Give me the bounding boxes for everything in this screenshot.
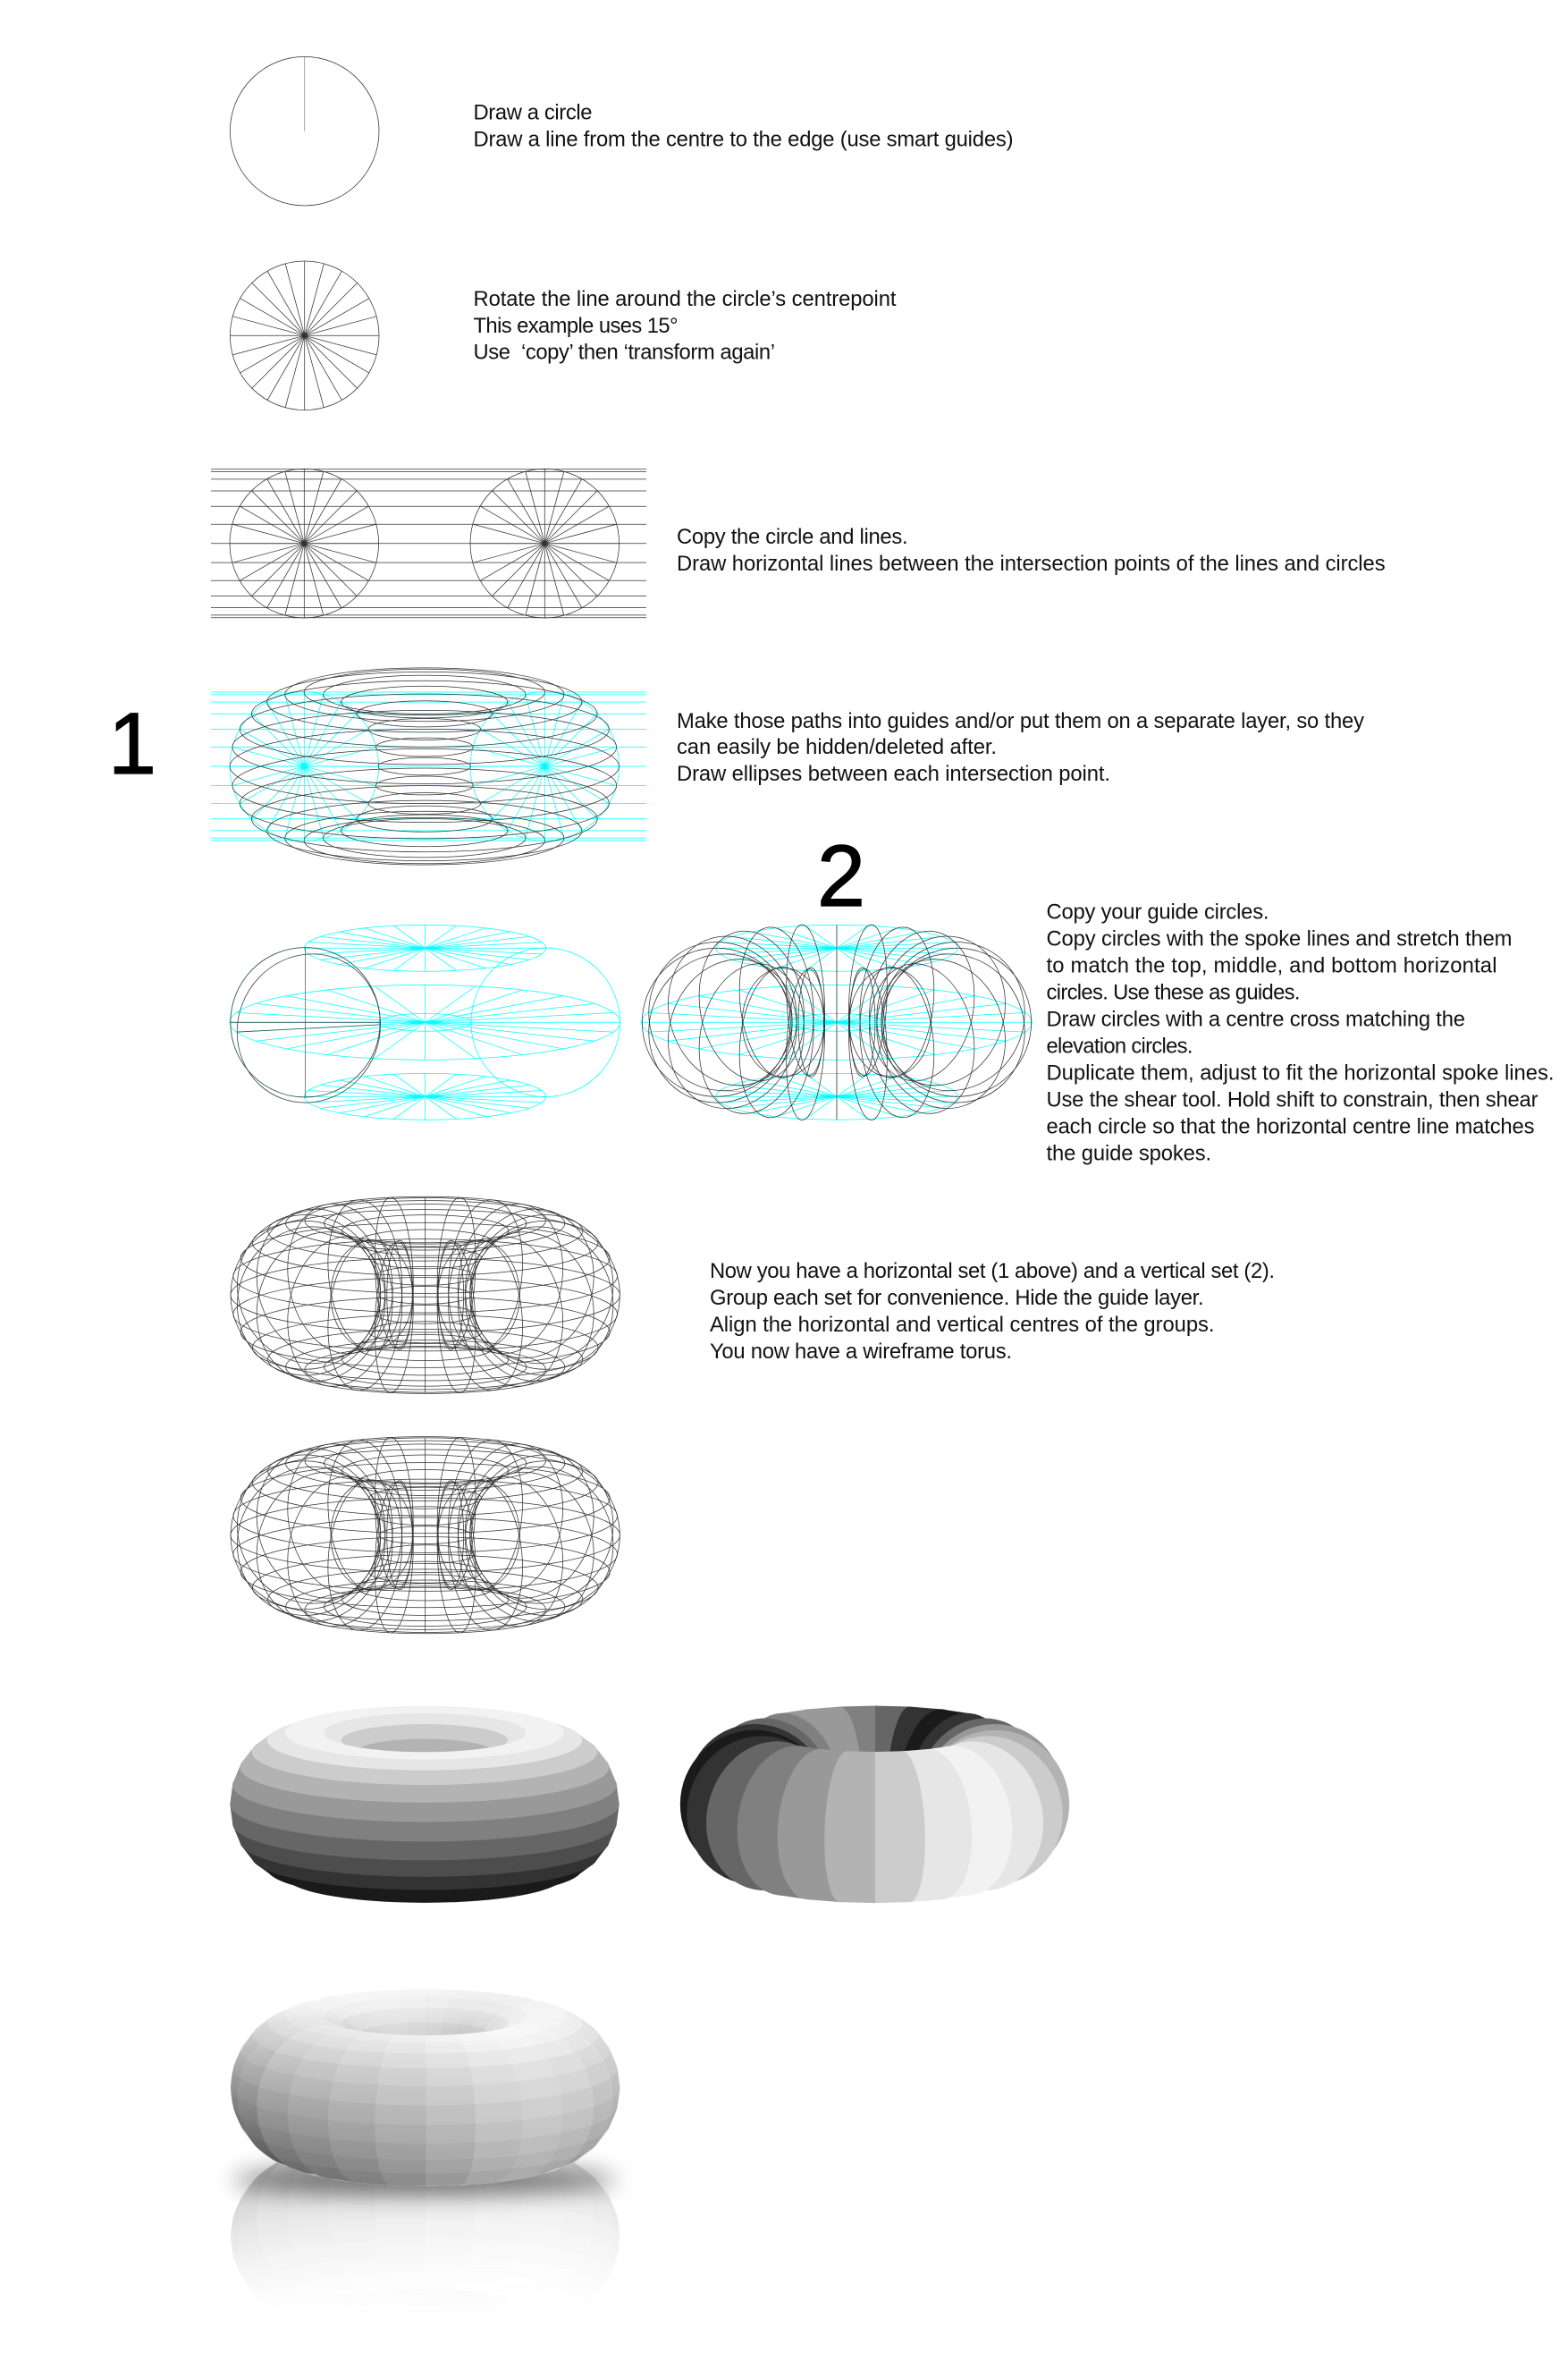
sheared circle with centre line <box>237 951 381 1106</box>
step 1 text <box>474 100 1014 151</box>
number 1: 1 <box>108 695 156 792</box>
step 5 right: vertical set over guides <box>642 912 1032 1133</box>
step 5 text: circles. Use these as guides. <box>1046 981 1300 1005</box>
cyan right guide circle <box>471 948 620 1097</box>
step 3: two circles with horizontal lines <box>211 469 1386 618</box>
step 1 text: Draw a circle <box>474 100 592 124</box>
step 1 text: Draw a line from the centre to the edge (use smart guides) <box>474 127 1014 151</box>
step 3 text: Copy the circle and lines. <box>677 525 908 549</box>
shaded torus <box>231 1977 620 2198</box>
vertical circle set <box>642 912 1032 1133</box>
step 4: horizontal ellipses <box>211 668 1364 865</box>
step 4 text: can easily be hidden/deleted after. <box>677 735 997 759</box>
step 4 text: Draw ellipses between each intersection point. <box>677 762 1110 786</box>
step 3 text: Draw horizontal lines between the intersection points of the lines and circles <box>677 552 1386 576</box>
step 7: second wireframe torus <box>231 1424 620 1645</box>
step 2 text: This example uses 15° <box>474 314 678 338</box>
step 4 text <box>677 709 1364 786</box>
step 5 text: each circle so that the horizontal centre line matches <box>1046 1115 1535 1139</box>
number 2: 2 <box>817 827 865 925</box>
step 6 text: Now you have a horizontal set (1 above) and a vertical set (2). <box>710 1259 1275 1283</box>
step 2 text: Use ‘copy’ then ‘transform again’ <box>474 340 775 365</box>
drop shadow <box>232 2167 617 2194</box>
step 5 text: to match the top, middle, and bottom horizontal <box>1046 954 1496 978</box>
step 6 text: Align the horizontal and vertical centres of the groups. <box>710 1313 1214 1337</box>
step 6 text: Group each set for convenience. Hide the guide layer. <box>710 1286 1204 1310</box>
horizontal ellipse set <box>230 668 619 865</box>
cyan guide ellipses <box>230 925 620 1120</box>
step 6: wireframe torus <box>231 1185 1275 1406</box>
step 8: torus with horizontal bands <box>230 1706 620 1903</box>
reflection <box>231 2162 620 2277</box>
cyan guides <box>211 692 646 841</box>
step 2: rotated spokes <box>230 261 897 410</box>
step 5 text: the guide spokes. <box>1046 1142 1211 1166</box>
step 5 left: guide ellipses with first circles <box>230 925 620 1120</box>
step 9: combined shaded torus with reflection and shadow <box>226 1989 623 2277</box>
spoked circle <box>230 261 379 410</box>
step 5 text: Copy your guide circles. <box>1046 900 1269 925</box>
step 5 text: elevation circles. <box>1046 1035 1193 1059</box>
step 6 text: You now have a wireframe torus. <box>710 1340 1012 1364</box>
step 5 text: Copy circles with the spoke lines and stretch them <box>1046 927 1513 951</box>
step 8: torus with vertical bands <box>680 1695 1069 1915</box>
step 6 text <box>710 1259 1275 1364</box>
left circle with centre cross <box>231 948 380 1097</box>
circle and radius line <box>230 56 379 206</box>
step 5 text: Use the shear tool. Hold shift to constrain, then shear <box>1046 1088 1538 1112</box>
step 2 text: Rotate the line around the circle’s centrepoint <box>474 287 897 311</box>
step 5 text: Duplicate them, adjust to fit the horizontal spoke lines. <box>1046 1061 1554 1086</box>
step 5 text: Draw circles with a centre cross matching the <box>1046 1008 1465 1032</box>
step 5 text <box>1046 900 1554 1166</box>
wireframe torus <box>231 1185 620 1406</box>
cyan guide ellipses <box>642 925 1032 1120</box>
step 1: circle with one line <box>230 56 1014 206</box>
step 2 text <box>474 287 897 365</box>
two spoked circles and horizontal lines <box>211 469 646 618</box>
step 4 text: Make those paths into guides and/or put them on a separate layer, so they <box>677 709 1364 733</box>
step 3 text <box>677 525 1386 576</box>
